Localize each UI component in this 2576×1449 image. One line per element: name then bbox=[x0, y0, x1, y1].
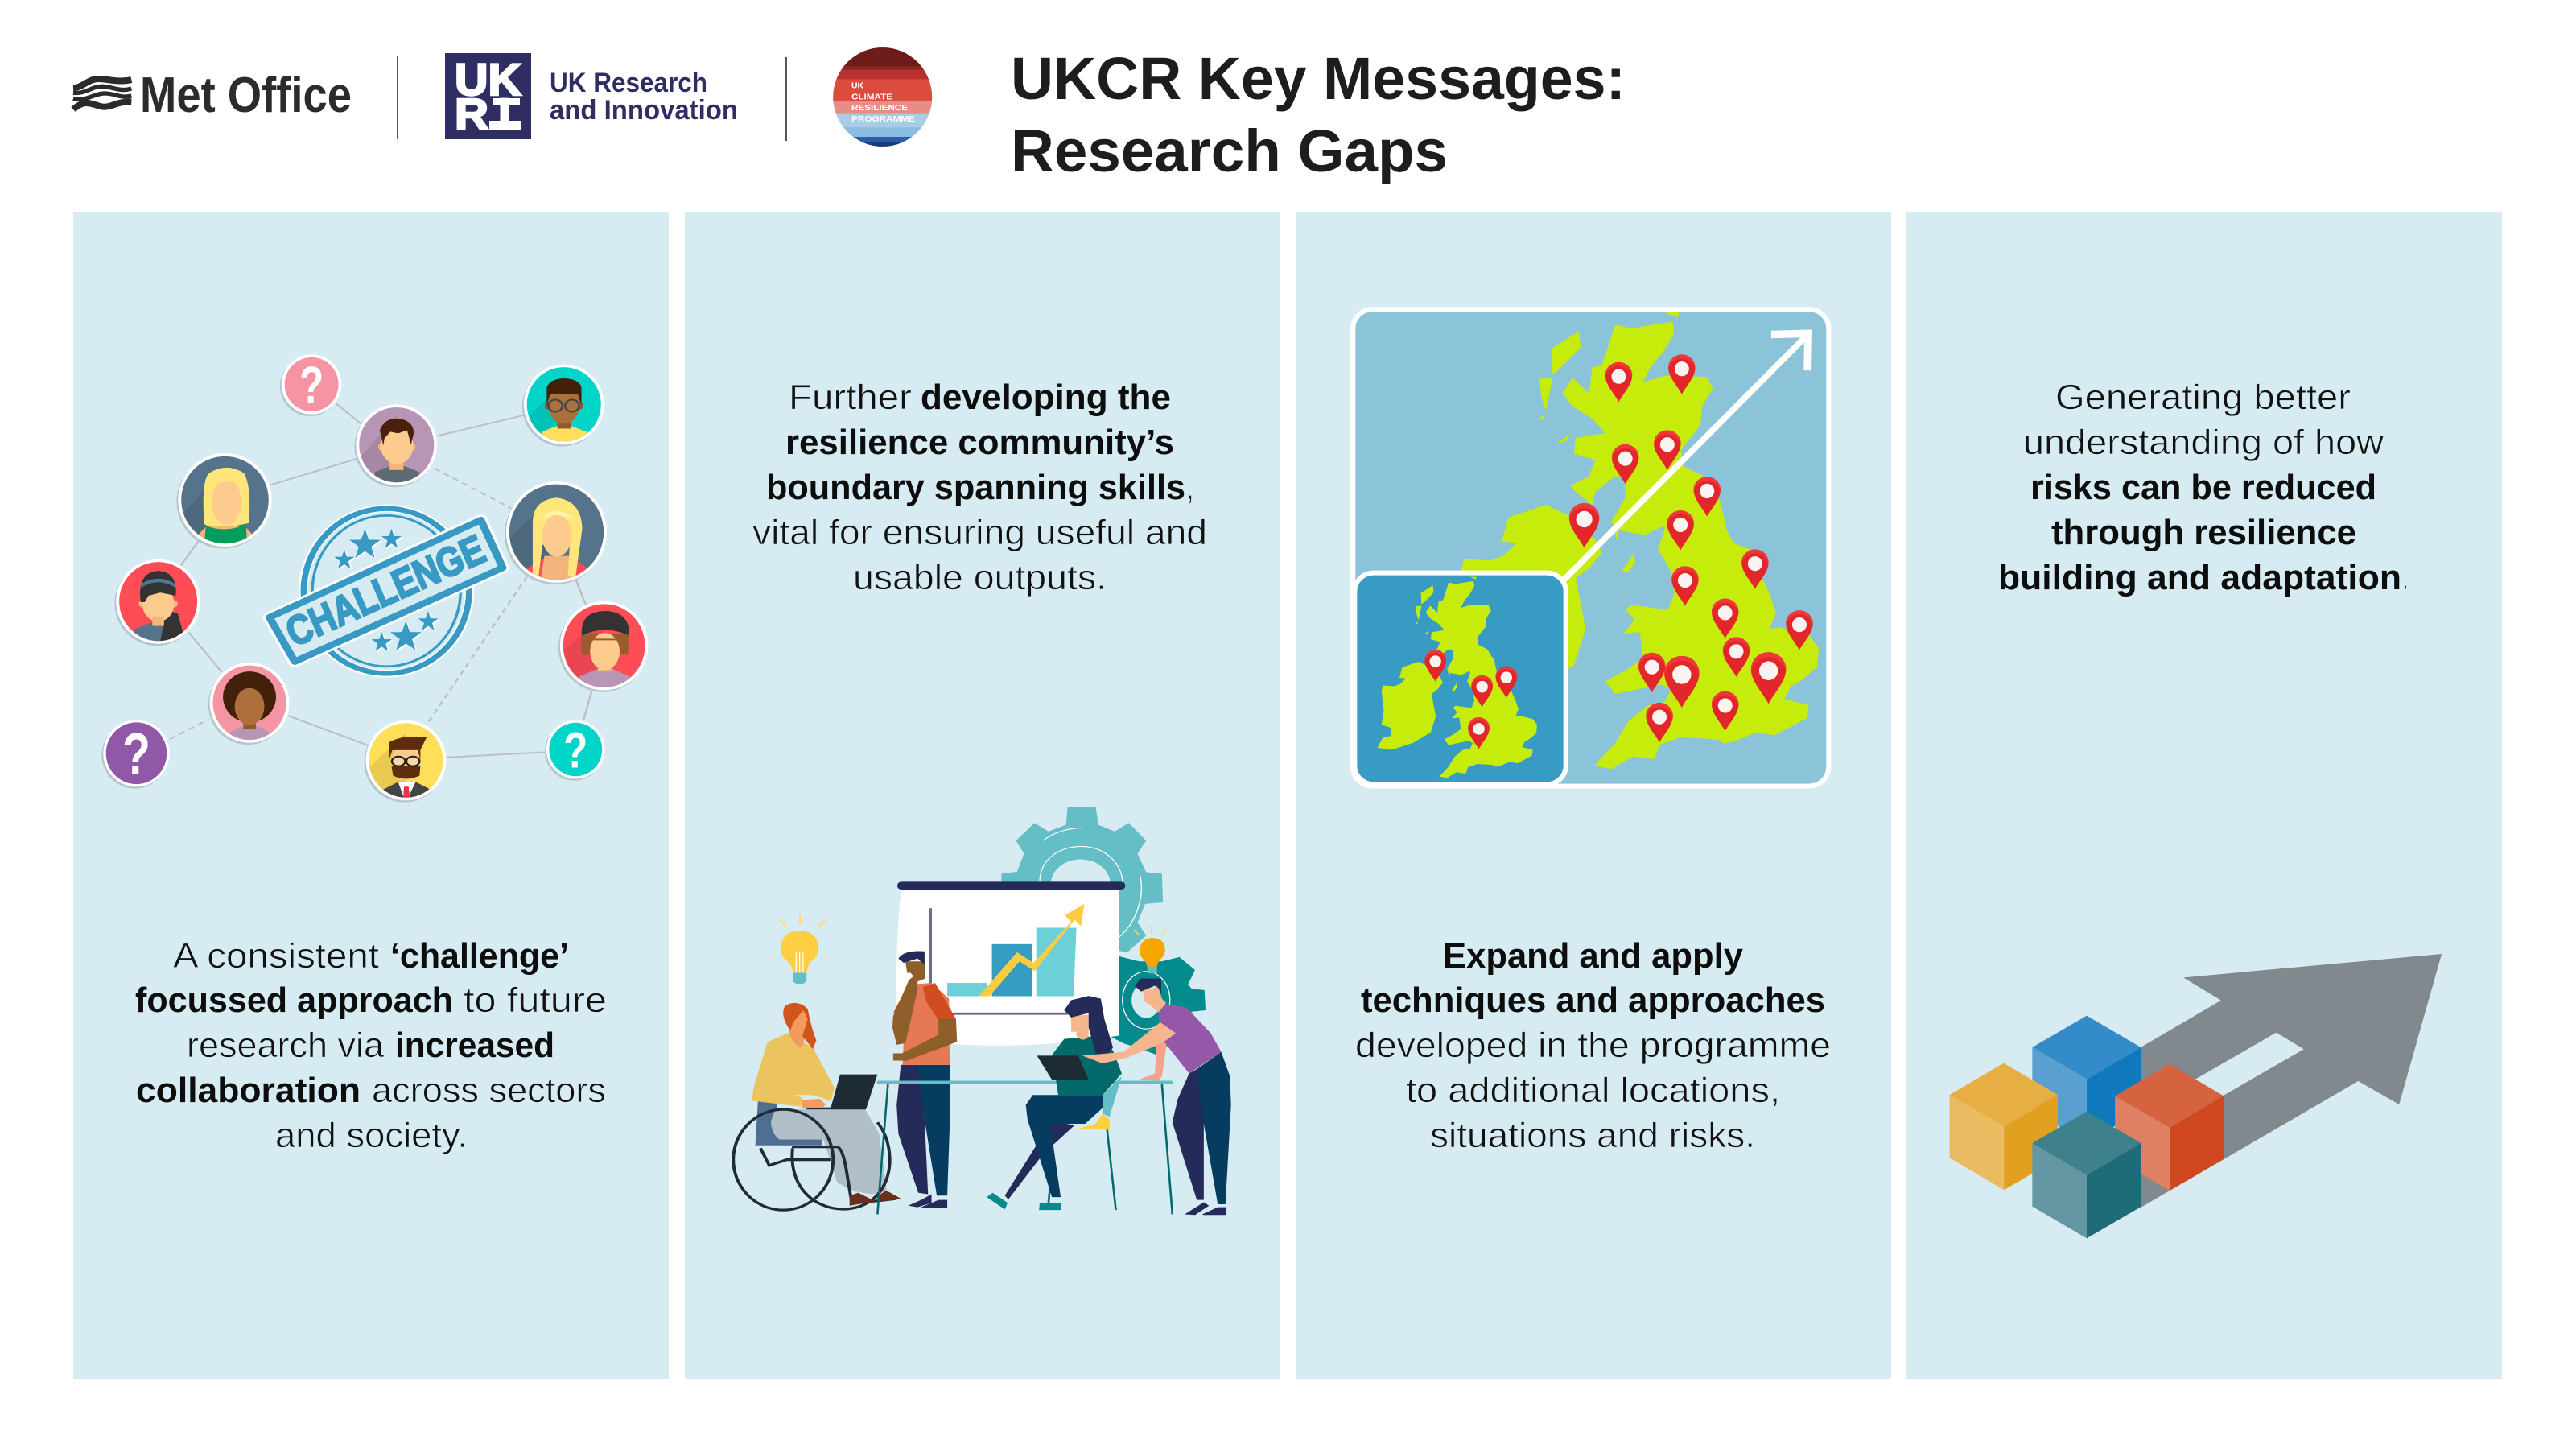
text: challenge message: across sectors bbox=[372, 1071, 606, 1110]
illustration: team around presentation bbox=[733, 807, 1231, 1215]
logo: UK Climate Resilience Programme bbox=[833, 47, 932, 147]
logo: UK Climate Resilience Programme: UK bbox=[851, 80, 863, 90]
text: expand message: developed in the programme bbox=[1355, 1026, 1831, 1065]
logo: UK Climate Resilience Programme: CLIMATE bbox=[851, 92, 892, 101]
avatar: woman with braid bbox=[505, 481, 607, 584]
wordmark: Met Office: Met Office bbox=[140, 68, 352, 123]
arrow: upward growth bbox=[2141, 954, 2442, 1208]
text: risk reduction message: understanding of how bbox=[2023, 423, 2384, 462]
logo: Met Office bbox=[73, 68, 352, 123]
text: expand message: techniques and approaches bbox=[1361, 980, 1825, 1020]
icon: UKRI square: R bbox=[455, 90, 488, 138]
avatar: man with beard and glasses bbox=[365, 720, 446, 803]
stamp: challenge bbox=[270, 508, 503, 674]
icon: question mark purple: ? bbox=[122, 721, 150, 787]
person in wheelchair with laptop bbox=[733, 1003, 901, 1210]
icon: light bulb left bbox=[780, 914, 826, 984]
text: boundary spanning message: resilience community’s bbox=[785, 423, 1174, 462]
text: boundary spanning message: usable outputs. bbox=[853, 558, 1107, 597]
map: large UK bbox=[1451, 312, 1819, 769]
text: challenge message: and society. bbox=[275, 1116, 468, 1155]
cube: orange bbox=[2115, 1064, 2224, 1191]
text: boundary spanning message bbox=[752, 378, 1207, 597]
avatar: woman with headband bbox=[114, 559, 200, 646]
stamp: challenge: CHALLENGE bbox=[279, 526, 492, 655]
text: challenge message: research via bbox=[187, 1026, 385, 1065]
text: expand message bbox=[1355, 936, 1831, 1155]
text: challenge message: increased bbox=[395, 1026, 554, 1065]
text: risk reduction message: building and adaptation bbox=[1998, 558, 2401, 597]
panel: boundary spanning skills bbox=[685, 212, 1280, 1379]
arrow: scaling up bbox=[1564, 333, 1808, 580]
icon: UKRI square bbox=[445, 53, 531, 139]
text: challenge message: collaboration bbox=[136, 1071, 361, 1110]
illustration: building blocks and arrow bbox=[1950, 954, 2442, 1238]
text: boundary spanning message: , bbox=[1187, 468, 1193, 507]
panel: challenge approach bbox=[73, 212, 669, 1379]
illustration: collaboration network bbox=[101, 354, 648, 803]
icon: light bulb right bbox=[1134, 926, 1166, 973]
person standing in thought bbox=[892, 952, 957, 1208]
icon: UKRI square: I bbox=[498, 90, 511, 138]
icon: Met Office waves bbox=[73, 79, 131, 109]
logo: UK Climate Resilience Programme: RESILIENCE bbox=[851, 103, 908, 113]
logo: UK Research and Innovation bbox=[445, 53, 738, 139]
presentation board with bar chart bbox=[896, 881, 1125, 1046]
title bbox=[1011, 45, 1626, 184]
person seated with laptop bbox=[987, 996, 1122, 1210]
panel: risk reduction bbox=[1906, 212, 2502, 1379]
logo: UK Climate Resilience Programme: PROGRAMME bbox=[851, 114, 915, 124]
avatar: person with beanie bbox=[558, 601, 648, 692]
text: risk reduction message bbox=[1998, 378, 2408, 597]
icon: UKRI square: UK bbox=[455, 54, 521, 105]
avatar: blonde woman bbox=[176, 453, 272, 549]
text: boundary spanning message: Further bbox=[789, 378, 912, 417]
text: challenge message: to future bbox=[464, 980, 607, 1020]
icon: question mark pink bbox=[280, 354, 341, 416]
text: challenge message bbox=[135, 936, 607, 1155]
avatar: person with afro bbox=[208, 663, 289, 745]
cube: teal bbox=[2032, 1112, 2141, 1238]
map inset: small UK bbox=[1354, 573, 1566, 784]
text: expand message: to additional locations, bbox=[1406, 1071, 1780, 1110]
wordmark: and Innovation: and Innovation bbox=[550, 95, 738, 126]
wordmark: UK Research: UK Research bbox=[550, 68, 707, 98]
cube: blue bbox=[2032, 1016, 2141, 1142]
title: UKCR Key Messages: bbox=[1011, 45, 1626, 112]
text: boundary spanning message: developing the bbox=[921, 378, 1171, 417]
text: risk reduction message: risks can be reduced bbox=[2030, 468, 2376, 507]
text: expand message: Expand and apply bbox=[1443, 936, 1744, 976]
icon: question mark purple bbox=[101, 720, 170, 789]
cube: yellow bbox=[1950, 1063, 2058, 1190]
icon: question mark teal: ? bbox=[563, 721, 587, 778]
text: challenge message: ‘challenge’ bbox=[390, 936, 569, 976]
text: risk reduction message: Generating better bbox=[2055, 378, 2351, 417]
avatar: man with dark hair bbox=[354, 404, 437, 487]
person leaning over table bbox=[1082, 979, 1231, 1215]
panel: expand techniques bbox=[1296, 212, 1891, 1379]
icon: question mark teal bbox=[545, 720, 605, 781]
text: risk reduction message: through resilience bbox=[2051, 513, 2356, 552]
table bbox=[876, 1080, 1173, 1215]
icon: question mark pink: ? bbox=[299, 356, 324, 415]
text: expand message: situations and risks. bbox=[1430, 1116, 1755, 1155]
illustration: UK map with locations bbox=[1353, 309, 1828, 786]
location pins on large map bbox=[1569, 354, 1813, 742]
icon: small gear bbox=[1110, 956, 1206, 1055]
panel: risk reduction: . bbox=[2403, 558, 2408, 597]
network connectors bbox=[170, 403, 592, 758]
text: boundary spanning message: boundary spanning skills bbox=[766, 468, 1185, 507]
map frame bbox=[1353, 309, 1828, 786]
text: challenge message: A consistent bbox=[173, 936, 379, 976]
text: boundary spanning message: vital for ensuring useful and bbox=[752, 513, 1207, 552]
icon: large gear bbox=[1001, 807, 1163, 953]
text: challenge message: focussed approach bbox=[135, 980, 453, 1020]
avatar: man with glasses bbox=[522, 365, 604, 447]
title: Research Gaps bbox=[1011, 118, 1448, 184]
